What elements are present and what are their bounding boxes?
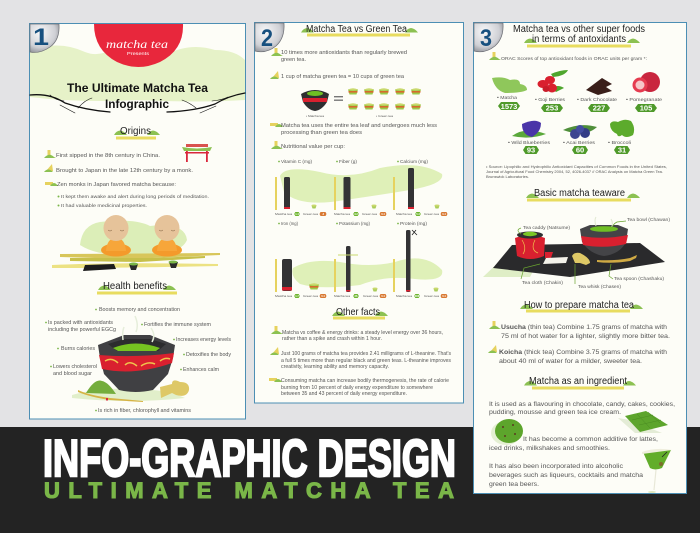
panel 2: matcha tea vs green tea xyxy=(254,22,464,403)
heading: Matcha Tea vs Green Tea: Matcha Tea vs Green Tea xyxy=(306,24,407,35)
chart: nutrition row two: Matcha tea xyxy=(334,294,350,298)
ingredient text: beverages such as liqueurs, cocktails and matcha xyxy=(489,472,643,479)
chart: nutrition row one: Vitamin C (mg) xyxy=(281,159,312,165)
panel 3: super foods, teaware, preparation, ingredient xyxy=(474,22,686,494)
source note: Brunswick Laboratories. xyxy=(486,175,529,179)
teaware callouts: Tea whisk (Chasen) xyxy=(578,284,621,289)
other facts text: a full 5 times more than regular black and green teas. L-theanine improves xyxy=(281,358,451,364)
health benefit labels: and blood sugar xyxy=(53,371,92,377)
health benefit labels: Increases energy levels xyxy=(176,337,231,343)
preparation instructions xyxy=(488,321,670,365)
chart: nutrition row two: 0.4 xyxy=(381,294,385,298)
chart: nutrition row one: .3 xyxy=(322,212,325,216)
food: goji berries: • Goji Berries xyxy=(535,97,566,102)
other facts text: burning from 10 percent of daily energy expenditure to somewhere xyxy=(281,385,433,391)
source note: • Source: Lipophilic and Hydrophilic Antioxidant Capacities of Common Foods in the United States, xyxy=(486,165,667,169)
chart: nutrition row one: Calcium (mg) xyxy=(400,159,428,165)
badge 1: 1 xyxy=(33,24,49,51)
chart: nutrition row two: Green tea xyxy=(363,294,378,298)
illustration: matcha bowl with whisk and spoon xyxy=(72,316,189,402)
ingredient text: It has also been incorporated into alcoholic xyxy=(489,463,624,470)
main title xyxy=(67,81,208,111)
health benefit labels: Burns calories xyxy=(61,346,95,352)
teaware callouts xyxy=(518,217,671,289)
other facts text: Matcha vs coffee & energy drinks: a steady level energy over 36 hours, xyxy=(282,330,443,336)
red sun logo: matcha tea xyxy=(106,37,168,51)
food: matcha xyxy=(492,77,527,111)
chart: nutrition row one: Green tea xyxy=(362,212,377,216)
chart: nutrition row two: Matcha tea xyxy=(275,294,292,298)
other facts text: creativity, learning ability and memory capacity. xyxy=(281,364,389,370)
origins text: First sipped in the 8th century in China. xyxy=(56,153,160,159)
icon: torii gate xyxy=(182,144,212,162)
heading: How to prepare matcha tea: How to prepare matcha tea xyxy=(524,300,634,311)
chart: nutrition row one: 0.4 xyxy=(381,212,385,216)
heading: Matcha as an ingredient: Matcha as an ingredient xyxy=(529,376,627,387)
illustration: one matcha bowl equals ten green tea cups xyxy=(301,88,421,118)
heading: Matcha tea vs other super foods xyxy=(513,24,645,48)
chart: nutrition row two: Green tea xyxy=(303,294,318,298)
preparation instructions: Usucha (thin tea) Combine 1.75 grams of matcha with xyxy=(501,324,667,331)
preparation instructions: Koicha (thick tea) Combine 3.75 grams of matcha with xyxy=(499,349,667,356)
food: acai berries xyxy=(563,125,597,154)
heading: Health benefits xyxy=(97,281,177,294)
badge 3: 3 xyxy=(480,25,492,52)
red sun logo: Presents xyxy=(127,51,150,56)
food: pomegranate: 105 xyxy=(640,104,652,112)
source note: Journal of Agricultural Food Chemistry 2004, 52, 4026-4037 // ORAC Analysis on Matcha Green Tea. xyxy=(486,170,663,174)
chart: nutrition row one: 3.2 xyxy=(354,212,358,216)
comparison notes: 10 times more antioxidants than regularly brewed xyxy=(281,50,407,56)
chart: nutrition row one: Fiber (g) xyxy=(339,159,357,165)
ORAC intro: ORAC Scores of top antioxidant foods in ORAC units per gram *: xyxy=(501,56,647,61)
chart: nutrition row one: 0.4 xyxy=(442,212,446,216)
heading: Origins: Origins xyxy=(120,126,151,137)
health benefit labels: Enhances calm xyxy=(183,367,219,373)
chart: nutrition row two: Green tea xyxy=(424,294,439,298)
teaware callouts: Tea bowl (Chawan) xyxy=(627,217,671,222)
green landscape backdrop xyxy=(30,45,245,102)
chart: nutrition row two: Potassium (mg) xyxy=(339,221,370,227)
chart: nutrition row two: 26 xyxy=(355,294,358,298)
food: broccoli xyxy=(608,120,634,154)
footer subtitle: ULTIMATE MATCHA TEA xyxy=(44,478,454,503)
branches xyxy=(30,93,245,113)
preparation instructions: about 40 ml of water for a milder, sweeter tea. xyxy=(499,358,642,365)
icon: matcha cocktail xyxy=(642,449,672,493)
food: broccoli: • Broccoli xyxy=(608,140,631,145)
illustration: teaware on tray xyxy=(483,217,665,277)
comparison notes: Nutritional value per cup: xyxy=(281,144,345,150)
chart: nutrition row two: 1.7 xyxy=(295,294,299,298)
heading: Other facts: Other facts xyxy=(336,306,380,318)
chart: nutrition row one: 5.3 xyxy=(416,212,420,216)
panel 1: introduction, origins, health benefits xyxy=(30,24,246,419)
chart: nutrition row one: 1.4 xyxy=(295,212,299,216)
teaware callouts: Tea caddy (Natsume) xyxy=(523,225,570,230)
health benefit labels: Boosts memory and concentration xyxy=(99,307,180,313)
food: dark chocolate: 227 xyxy=(593,104,605,112)
heading: Health benefits: Health benefits xyxy=(103,281,167,292)
badge 3 xyxy=(474,23,503,52)
badge 2: 2 xyxy=(261,25,273,52)
chart: nutrition row two xyxy=(275,221,448,298)
heading: Matcha tea vs other super foods: Matcha tea vs other super foods xyxy=(513,24,645,35)
illustration: one matcha bowl equals ten green tea cups: • Matcha tea xyxy=(306,114,324,118)
ingredient text: pudding, mousse and green tea ice cream. xyxy=(489,409,621,416)
chart: nutrition row two: Matcha tea xyxy=(396,294,412,298)
origins text: Brought to Japan in the late 12th century by a monk. xyxy=(56,168,193,174)
food: wild blueberries: • Wild Blueberries xyxy=(508,140,551,145)
ingredient text: iced drinks, milkshakes and smoothies. xyxy=(489,445,610,452)
comparison notes: 1 cup of matcha green tea = 10 cups of green tea xyxy=(281,74,404,80)
health benefit labels: Is packed with antioxidants xyxy=(48,320,113,326)
main title: Infographic xyxy=(105,97,169,111)
chart: nutrition row two: 0.4 xyxy=(321,294,325,298)
other facts text xyxy=(269,326,451,397)
food: acai berries: • Acai Berries xyxy=(563,140,596,145)
illustration: meditating monks xyxy=(52,215,220,271)
food: goji berries xyxy=(535,70,568,112)
comparison notes: processing than green tea does xyxy=(281,130,362,136)
ingredient text: It is used as a flavouring in chocolate, candy, cakes, cookies, xyxy=(489,401,675,408)
health benefit labels: Detoxifies the body xyxy=(186,352,231,358)
chart: nutrition row two: 0.4 xyxy=(442,294,446,298)
origins text: It had valuable medicinal properties. xyxy=(61,203,147,208)
food: pomegranate: • Pomegranate xyxy=(626,97,663,102)
food: matcha: 1573 xyxy=(501,102,517,111)
comparison notes: Matcha tea uses the entire tea leaf and undergoes much less xyxy=(281,123,437,129)
other facts text: Consuming matcha can increase bodily thermogenesis, the rate of calorie xyxy=(281,378,449,384)
heading: Basic matcha teaware: Basic matcha teaware xyxy=(534,188,625,199)
icon: matcha cookie xyxy=(491,419,523,445)
other facts text: between 35 and 43 percent of daily energy expenditure. xyxy=(281,391,407,397)
badge 2 xyxy=(255,23,284,52)
other facts text: rather than a spike and crash within 1 hour. xyxy=(282,336,382,342)
badge 1 xyxy=(30,24,59,52)
food: wild blueberries xyxy=(508,121,551,154)
icon: green chocolate bar xyxy=(618,411,668,433)
ingredient text: green tea beers. xyxy=(489,481,539,488)
footer band xyxy=(0,427,700,533)
food: broccoli: 31 xyxy=(618,146,626,154)
food: matcha: • Matcha xyxy=(497,95,517,100)
chart: nutrition row two: Protein (mg) xyxy=(400,221,427,227)
chart: nutrition row one: Matcha tea xyxy=(396,212,412,216)
comparison notes: green tea. xyxy=(281,57,306,63)
origins text: It kept them awake and alert during long periods of meditation. xyxy=(61,194,209,199)
illustration: one matcha bowl equals ten green tea cups: • Green tea xyxy=(376,114,393,118)
origins text xyxy=(44,150,209,208)
footer title: INFO-GRAPHIC DESIGN xyxy=(43,430,456,488)
chart: nutrition row two: Iron (mg) xyxy=(281,221,298,227)
health benefit labels: including the powerful EGCg xyxy=(48,327,116,333)
ORAC intro xyxy=(489,52,647,61)
chart: nutrition row one: Green tea xyxy=(424,212,439,216)
chart: nutrition row two: 306 xyxy=(415,294,420,298)
ingredient text xyxy=(489,401,675,488)
food: dark chocolate: • Dark Chocolate xyxy=(577,97,618,102)
heading: Matcha tea vs other super foods: in terms of antoxidants xyxy=(532,34,626,45)
red sun logo xyxy=(94,24,183,67)
health benefit labels: Is rich in fiber, chlorophyll and vitamins xyxy=(98,408,191,414)
food: goji berries: 253 xyxy=(546,104,558,112)
origins text: Zen monks in Japan favored matcha because: xyxy=(57,182,176,188)
chart: nutrition row one: Matcha tea xyxy=(334,212,350,216)
preparation instructions: 75 ml of hot water for a lighter, slightly more bitter tea. xyxy=(501,333,670,340)
food: dark chocolate xyxy=(577,78,618,112)
comparison notes xyxy=(270,48,437,150)
chart: nutrition row one: Matcha tea xyxy=(275,212,292,216)
teaware callouts: Tea spoon (Chashaku) xyxy=(614,276,664,281)
health benefit labels: Fortifies the immune system xyxy=(144,322,212,328)
chart: nutrition row one: Green tea xyxy=(303,212,318,216)
heading: Origins xyxy=(114,126,160,140)
chart: nutrition row one xyxy=(275,159,448,216)
source note xyxy=(486,165,667,179)
food: wild blueberries: 93 xyxy=(527,146,535,154)
health benefit labels: Lowers cholesterol xyxy=(53,364,97,370)
other facts text: Just 100 grams of matcha tea provides 2.41 milligrams of L-theanine. That's xyxy=(281,351,451,357)
health benefit labels xyxy=(45,307,231,414)
teaware callouts: Tea cloth (Chakin) xyxy=(522,280,564,285)
main title: The Ultimate Matcha Tea xyxy=(67,81,208,95)
food: pomegranate xyxy=(626,72,663,112)
ingredient text: It has become a common additive for lattes, xyxy=(523,436,658,443)
food: acai berries: 60 xyxy=(576,146,584,154)
